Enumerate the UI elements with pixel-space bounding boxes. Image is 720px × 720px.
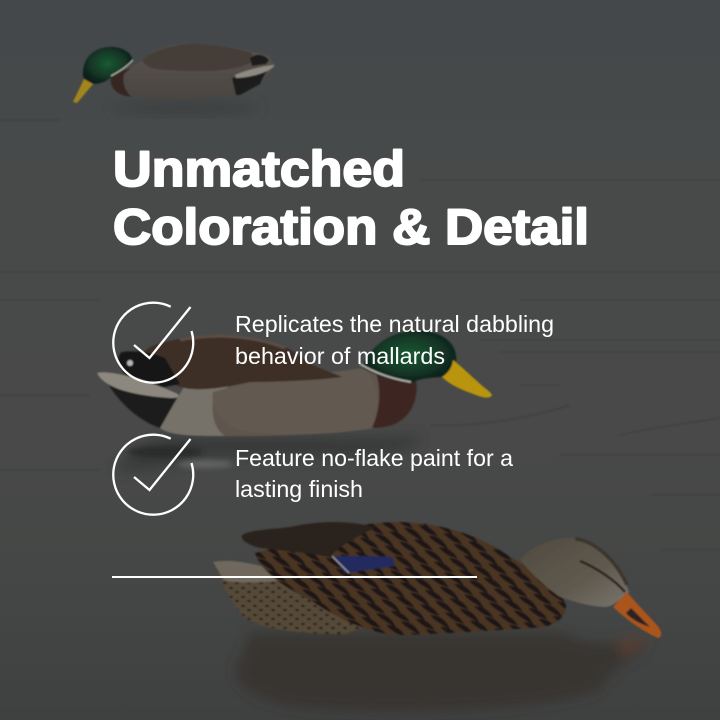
wing upper edge bbox=[180, 336, 285, 348]
duck: reflection dark patch bbox=[127, 446, 203, 458]
reflection bbox=[110, 101, 260, 115]
duck: top mallard decoy bbox=[73, 44, 275, 115]
body bbox=[165, 365, 417, 436]
neck ring bbox=[111, 60, 133, 76]
white flank bbox=[160, 385, 230, 436]
eye stripe bbox=[580, 561, 625, 592]
hen head bbox=[520, 538, 629, 607]
tail feathers bbox=[213, 561, 300, 583]
dark folded wing bbox=[242, 522, 375, 557]
text: bullet 1: Replicates the natural dabbling bbox=[235, 311, 554, 337]
text: bullet 1 bbox=[235, 311, 554, 369]
duck: reflection light patch bbox=[177, 460, 233, 468]
water ripples bbox=[0, 120, 720, 550]
head bbox=[83, 47, 132, 84]
main feather body bbox=[255, 522, 566, 635]
head bbox=[362, 331, 456, 383]
duck: hen reflection bbox=[236, 632, 650, 711]
duck: bottom hen decoy bbox=[213, 522, 661, 638]
wing bbox=[142, 44, 252, 71]
divider rule bbox=[112, 576, 477, 578]
chest bbox=[111, 68, 132, 97]
text: bullet 2 bbox=[235, 445, 514, 502]
title: Coloration & Detail bbox=[113, 199, 589, 255]
text: bullet 2: Feature no-flake paint for a bbox=[235, 445, 514, 471]
grey side panel bbox=[212, 368, 377, 434]
title bbox=[113, 141, 589, 255]
icon: check circle 1 bbox=[113, 303, 193, 383]
duck: center mallard decoy bbox=[97, 331, 492, 436]
rump bbox=[232, 68, 268, 95]
icon: check circle 2 bbox=[113, 435, 193, 515]
tail bbox=[97, 372, 179, 398]
title: Unmatched bbox=[113, 141, 405, 197]
text: bullet 2: lasting finish bbox=[235, 476, 363, 502]
hen bill bbox=[613, 592, 661, 638]
duck: reflection of middle mallard bbox=[115, 436, 420, 471]
body bbox=[111, 44, 275, 98]
bill bbox=[442, 360, 492, 398]
blue speculum bbox=[332, 556, 395, 573]
chest bbox=[372, 370, 417, 428]
dark rump bbox=[106, 380, 178, 428]
neck ring bbox=[360, 364, 411, 382]
bill bbox=[73, 79, 93, 103]
wing bbox=[140, 335, 342, 389]
rear body speckle bbox=[213, 562, 370, 634]
text: bullet 1: behavior of mallards bbox=[235, 343, 445, 369]
